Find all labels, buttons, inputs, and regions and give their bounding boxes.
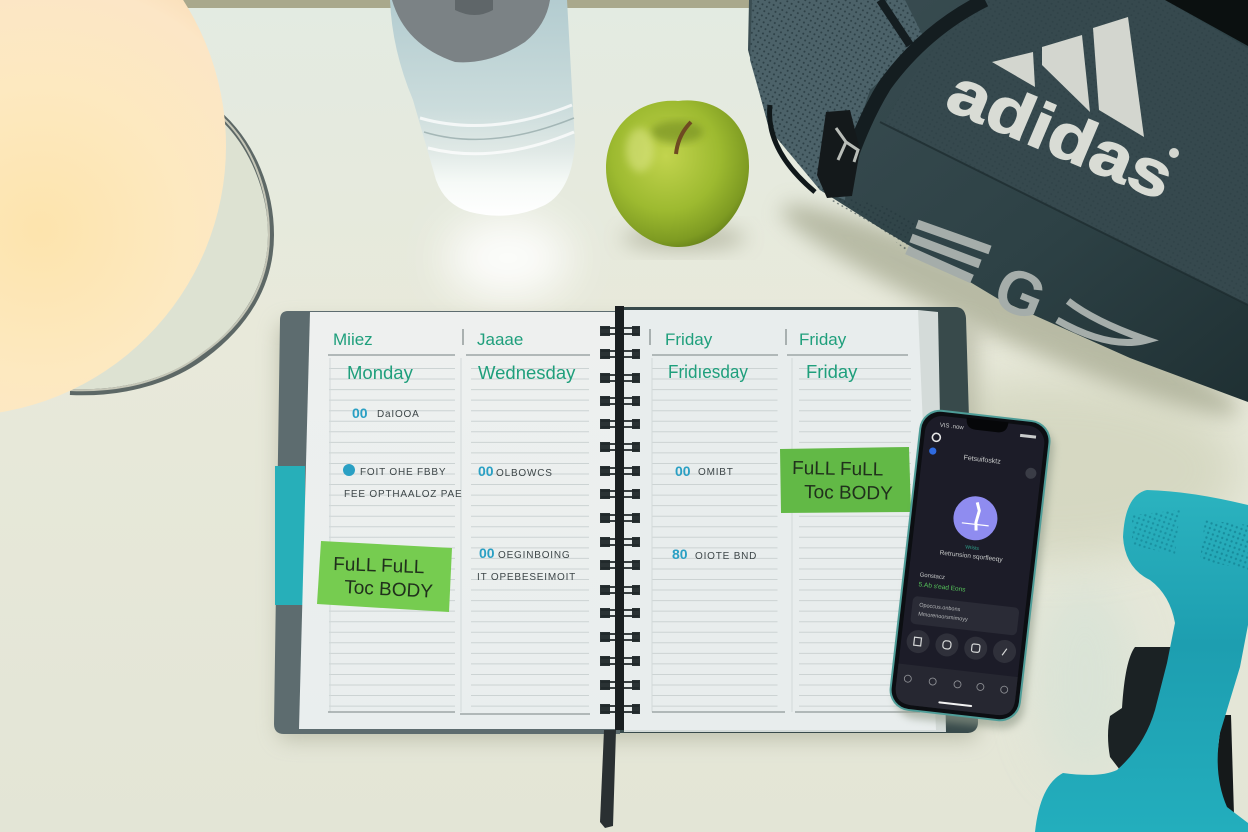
open planner: 00 <box>478 463 494 479</box>
day names: Monday <box>347 362 414 383</box>
sticky note left: FuLL FuLL <box>333 554 425 578</box>
status items <box>932 433 941 442</box>
lamp base ring <box>70 117 271 392</box>
info panel: Opoccus.onbons <box>919 603 961 613</box>
open planner: Wednesday <box>478 362 576 383</box>
open planner: OIOTE BND <box>695 551 757 562</box>
sticky note right <box>780 447 911 513</box>
planner left cover <box>274 311 620 734</box>
open planner: IT OPEBESEIMOIT <box>477 572 576 583</box>
sticky note right: FuLL FuLL <box>792 458 883 481</box>
info panel: Mmorenoorsmimoyy <box>918 611 968 623</box>
ruled lines <box>328 329 920 714</box>
notch <box>966 418 1008 433</box>
open planner: FOIT OHE FBBY <box>360 467 446 478</box>
tab bar <box>894 664 1018 717</box>
smartphone <box>887 408 1057 731</box>
teal elastic band <box>275 466 305 605</box>
apple stem <box>676 122 691 154</box>
open planner: DaIOOA <box>377 409 420 420</box>
gym bag <box>748 0 1248 439</box>
smartphone: Fetsuifosktz <box>963 455 1001 466</box>
phone body <box>887 408 1053 724</box>
gym bag: G <box>985 253 1055 335</box>
open planner: 00 <box>675 463 691 479</box>
open planner: 00 <box>479 545 495 561</box>
smartphone: Gonstacz <box>919 572 945 581</box>
bag seam <box>880 122 1248 305</box>
dumbbell strap <box>1108 647 1234 815</box>
action buttons <box>905 629 1017 664</box>
sticky note left: Toc BODY <box>344 577 434 603</box>
info panel <box>910 596 1020 636</box>
profile text: Wrists <box>965 544 980 552</box>
bag mesh side pocket <box>750 0 925 200</box>
lower mesh band <box>830 198 918 250</box>
smartphone: Retrunsion sqorfleeqy <box>939 550 1004 564</box>
bag piping and zip <box>840 0 985 190</box>
open planner: 80 <box>672 546 688 562</box>
wood strip behind desk <box>180 0 755 8</box>
smartphone: 5.Ab s'ead Eons <box>918 581 967 594</box>
planner right cover <box>620 307 978 733</box>
bottle glare on desk <box>446 218 570 298</box>
teal dumbbell <box>1035 490 1248 832</box>
bag front panel <box>880 0 1248 305</box>
ribbon bookmark <box>600 730 616 828</box>
open planner: Friday <box>665 330 713 349</box>
left page <box>299 312 616 729</box>
phone screen <box>894 414 1046 717</box>
green apple <box>606 100 749 250</box>
column headings: Miiez <box>333 330 373 349</box>
bottle cap <box>392 0 550 62</box>
sticky note left <box>317 541 452 612</box>
open planner: Fridıesday <box>668 361 749 382</box>
open planner: OEGINBOING <box>498 550 570 561</box>
right page <box>624 310 946 732</box>
sticky note right: Toc BODY <box>804 482 893 505</box>
soft tint near bag and dumbbell <box>860 380 1240 560</box>
glowing lamp globe <box>0 0 226 416</box>
dumbbell grip texture <box>1132 510 1180 555</box>
open planner: FEE OPTHAALOZ PAE <box>344 489 462 500</box>
planner shadow <box>278 322 978 740</box>
open planner: OMIBT <box>698 467 734 478</box>
water bands <box>420 105 574 154</box>
bag top dark corner <box>1165 0 1248 46</box>
zip pull <box>836 128 858 162</box>
purple avatar with figure <box>951 494 1000 543</box>
water bottle <box>390 0 575 298</box>
adidas wordmark: adidas <box>938 55 1184 214</box>
bag lower graphic <box>907 224 1147 342</box>
spiral binding <box>600 306 640 730</box>
open planner: Jaaae <box>477 330 523 349</box>
open planner: OLBOWCS <box>496 468 553 479</box>
open planner <box>274 306 978 828</box>
adidas stripes logo <box>992 17 1144 137</box>
smartphone: VIS .now <box>939 423 965 431</box>
open planner: Friday <box>799 330 847 349</box>
open planner: Friday <box>806 361 858 382</box>
planner entries: 00 <box>352 405 368 421</box>
